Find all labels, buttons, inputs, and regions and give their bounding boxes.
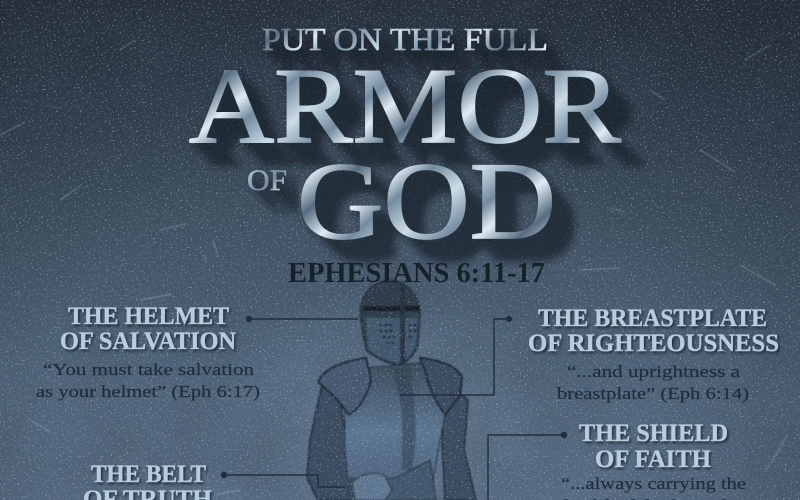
armor figure xyxy=(307,280,476,500)
label: breastplate of righteousness: OF RIGHTEOUSNESS xyxy=(528,330,779,357)
title: god: GOD xyxy=(297,140,556,262)
connector: breastplate xyxy=(400,316,512,395)
label: shield of faith: THE SHIELD xyxy=(579,420,728,447)
torso xyxy=(345,362,445,500)
label: helmet of salvation: “You must take salvation xyxy=(43,360,255,379)
label: helmet of salvation: OF SALVATION xyxy=(60,328,236,355)
label: shield of faith xyxy=(555,420,750,500)
left pauldron xyxy=(318,358,371,415)
label: helmet of salvation: THE HELMET xyxy=(68,303,229,330)
connector: belt xyxy=(222,472,345,487)
subtitle: scripture reference: EPHESIANS 6:11-17 xyxy=(288,258,545,289)
label: helmet of salvation xyxy=(36,303,260,401)
label: shield of faith: “...always carrying the xyxy=(561,474,746,493)
helmet xyxy=(360,280,420,365)
belt and hands xyxy=(350,460,436,500)
label: belt of truth xyxy=(83,461,213,500)
title: armor: ARMOR xyxy=(189,47,621,166)
label: breastplate of righteousness: “...and uprightness a xyxy=(567,362,741,381)
connector: helmet xyxy=(246,316,358,322)
title: put on the full: PUT ON THE FULL xyxy=(262,21,548,57)
visor slit xyxy=(363,306,420,311)
label: shield of faith: OF FAITH xyxy=(595,446,712,473)
label: breastplate of righteousness: breastplate” (Eph 6:14) xyxy=(557,384,749,403)
visor holes xyxy=(380,324,416,344)
title: of: OF xyxy=(247,164,287,197)
label: helmet of salvation: as your helmet” (Eph 6:17) xyxy=(36,382,260,401)
label: belt of truth: THE BELT xyxy=(91,461,206,488)
label: breastplate of righteousness xyxy=(528,305,779,403)
arms xyxy=(307,385,352,500)
connector: shield xyxy=(488,432,566,500)
breastplate shading xyxy=(392,368,416,470)
label: breastplate of righteousness: THE BREASTPLATE xyxy=(538,305,767,332)
right pauldron xyxy=(420,358,462,415)
